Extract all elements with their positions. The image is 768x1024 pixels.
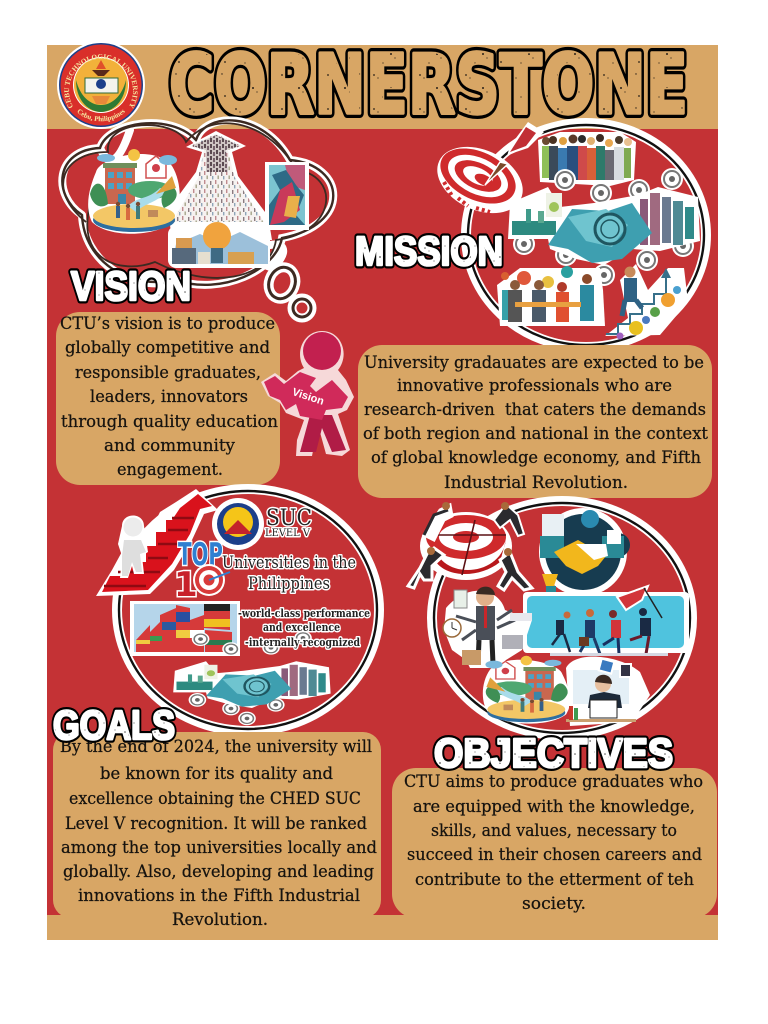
people group <box>538 132 636 186</box>
icon: university seal <box>57 43 145 129</box>
panel: vision text: engagement. <box>117 460 223 479</box>
panel: mission text <box>358 345 712 498</box>
ring <box>432 501 692 735</box>
panel: goals text: excellence obtaining the CHED SUC <box>69 789 361 808</box>
panel: vision text: responsible graduates, <box>75 363 261 382</box>
panel: objectives text: contribute to the etterment of teh <box>415 870 694 889</box>
world-class text: -world-class performance <box>238 607 370 620</box>
panel: objectives text: skills, and values, necessary to <box>431 821 677 840</box>
panel: objectives text <box>392 768 717 918</box>
top ten badge <box>174 537 230 605</box>
panel: objectives text: CTU aims to produce graduates who <box>404 772 703 791</box>
panel: goals text: By the end of 2024, the university will <box>60 737 372 756</box>
panel: objectives text: are equipped with the knowledge, <box>413 797 695 816</box>
puzzle label: Vision <box>291 386 326 408</box>
level label: LEVEL V <box>265 528 311 539</box>
panel: objectives illustration <box>408 501 692 735</box>
panel: mission text: of both region and national in the context <box>363 424 708 443</box>
meeting team <box>497 266 605 326</box>
panel: vision text: and community <box>104 436 236 455</box>
panel: goals text: Level V recognition. It will be ranked <box>65 814 367 833</box>
heading: goals: GOALS <box>53 702 175 748</box>
icon: puzzle figure <box>261 331 354 456</box>
panel: goals text: Revolution. <box>172 910 268 929</box>
panel: mission text: University gradauates are expected to be <box>364 353 704 372</box>
panel: goals text: innovations in the Fifth Industrial <box>78 886 360 905</box>
ranking text line 2: Philippines <box>248 574 330 593</box>
heading: vision: VISION <box>71 263 191 309</box>
world-class text: and excellence <box>263 621 340 634</box>
panel: goals illustration <box>96 489 379 731</box>
panel: vision text: globally competitive and <box>65 338 270 357</box>
running team banner <box>523 586 689 656</box>
flags photo <box>130 601 240 656</box>
climbing figure <box>118 516 148 578</box>
panel: vision text: leaders, innovators <box>90 387 248 406</box>
top ten badge: 1 <box>174 565 198 605</box>
top ten badge: TOP <box>178 537 223 573</box>
figure outline <box>261 331 354 456</box>
panel: mission text: innovative professionals who are <box>397 376 672 395</box>
puzzle piece <box>264 372 348 420</box>
heading: mission: MISSION <box>355 228 503 274</box>
city scene <box>483 656 570 724</box>
panel: vision text <box>56 312 280 485</box>
ring <box>466 123 706 347</box>
man climbing stairs <box>605 264 688 340</box>
footer band <box>47 915 718 940</box>
network icons <box>513 168 694 286</box>
red stairs arrow <box>96 489 218 596</box>
panel: mission text: Industrial Revolution. <box>444 473 628 492</box>
panel: vision illustration <box>62 120 333 318</box>
panel: goals text: be known for its quality and <box>100 764 333 783</box>
world-class text: -internally recognized <box>245 636 360 649</box>
ranking text: Universities in the <box>222 553 356 572</box>
panel: goals text: globally. Also, developing and leading <box>63 862 374 881</box>
CHED seal <box>212 498 264 550</box>
seal location: Cebu, Philippines <box>78 109 125 122</box>
abstract art card <box>265 162 309 230</box>
figure legs <box>300 415 346 452</box>
world-class text <box>238 607 370 649</box>
heading: vision: VISION <box>71 263 191 309</box>
panel: vision text: through quality education <box>61 412 278 431</box>
thought cloud <box>62 120 333 285</box>
handshake band <box>173 661 331 708</box>
light bulb scene <box>168 222 270 268</box>
panel: mission illustration <box>427 122 706 347</box>
header band <box>47 45 718 129</box>
panel: mission text: research-driven that caters the demands <box>364 400 706 419</box>
heading: goals: GOALS <box>53 702 175 748</box>
panel: vision text: CTU’s vision is to produce <box>60 314 275 333</box>
seal wording: CEBU TECHNOLOGICAL UNIVERSITY <box>64 54 138 109</box>
target with pushing men <box>408 502 532 590</box>
dark gear handshake <box>539 508 630 596</box>
SUC level label: SUC <box>266 506 312 531</box>
handshake and skyline <box>508 187 700 265</box>
panel: mission text: of global knowledge economy, and Fifth <box>371 448 701 467</box>
network icons <box>189 631 312 725</box>
target and dart <box>427 122 544 226</box>
panel: objectives text: succeed in their chosen careers and <box>407 845 702 864</box>
thought bubbles <box>264 264 312 318</box>
city scene <box>88 149 180 234</box>
heading: objectives: OBJECTIVES <box>434 730 673 776</box>
heading: mission: MISSION <box>355 228 503 274</box>
figure head <box>303 332 341 370</box>
poster background <box>47 45 718 940</box>
panel: objectives text: society. <box>522 894 586 913</box>
crowd forming an arrow <box>168 131 272 240</box>
multitasking businessman <box>443 587 532 668</box>
laptop worker <box>566 657 650 726</box>
panel: goals text <box>53 732 381 929</box>
heading: objectives: OBJECTIVES <box>434 730 673 776</box>
ring <box>117 489 379 731</box>
panel: goals text: among the top universities locally and <box>61 838 377 857</box>
